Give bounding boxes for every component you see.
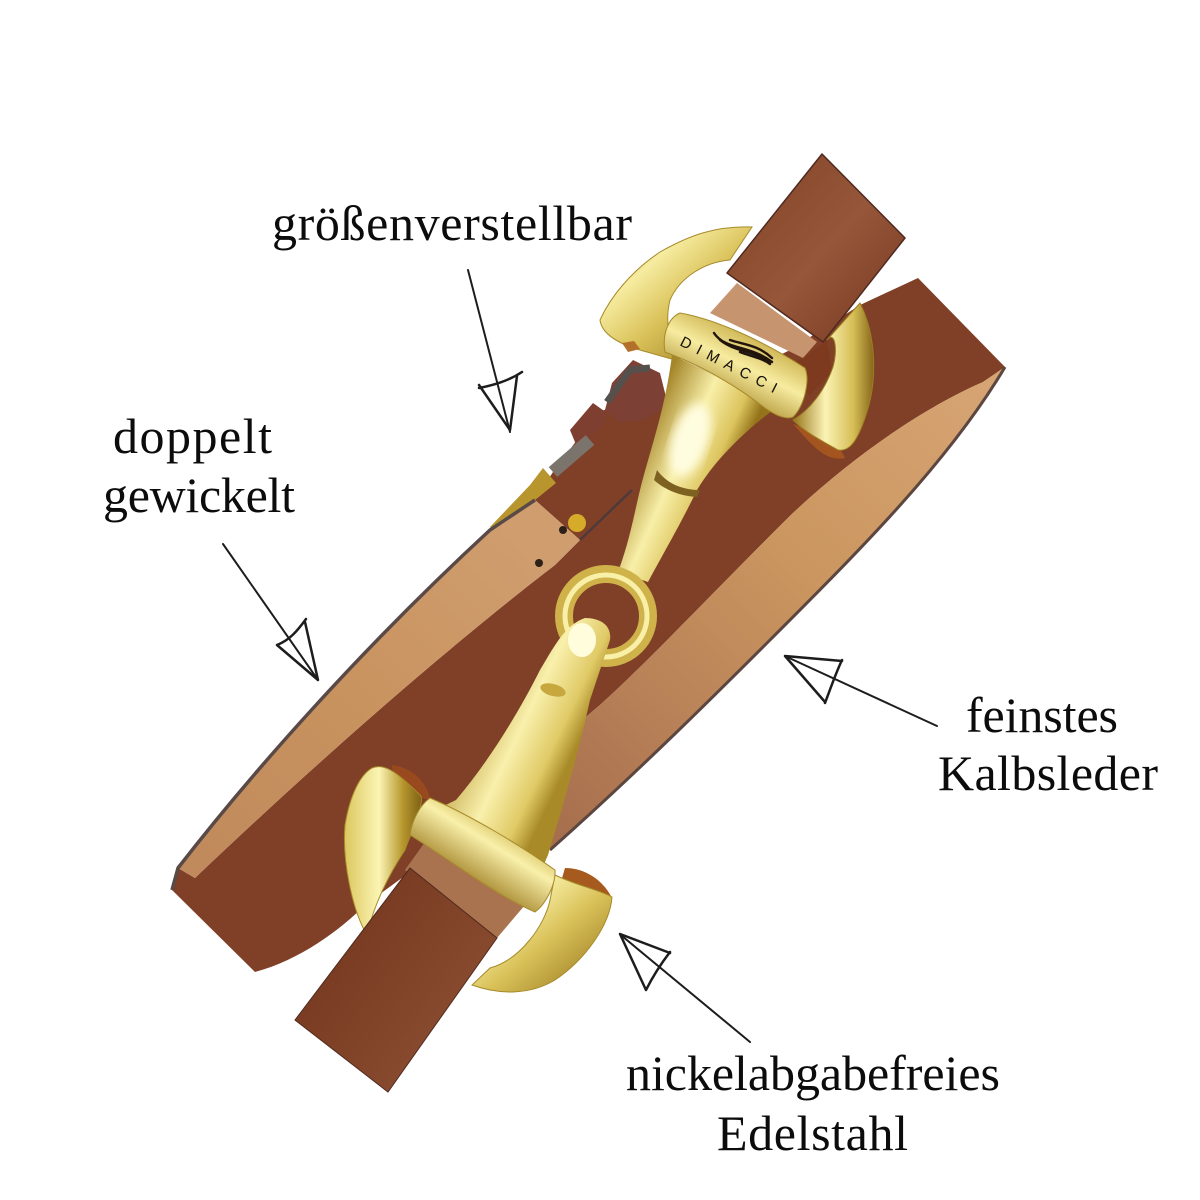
bracelet illustration xyxy=(172,154,1005,1092)
brand logo xyxy=(714,333,772,364)
lower-left wrap: dark edge xyxy=(172,500,535,890)
label: feinstes Kalbsleder: feinstes xyxy=(966,687,1118,743)
lower-left wrap: tan inside xyxy=(178,500,580,878)
top ring xyxy=(600,227,752,362)
small gold buckle xyxy=(490,468,556,533)
shank shadow band xyxy=(654,470,700,497)
label: feinstes Kalbsleder: Kalbsleder xyxy=(938,745,1158,801)
tan underside near lower bar xyxy=(405,835,525,938)
right wrap: dark edge xyxy=(550,367,1005,850)
lower-left horn xyxy=(344,765,430,935)
label: doppelt gewickelt xyxy=(103,408,295,523)
arrow: to adjustable strap xyxy=(468,270,522,432)
right horn of top ring xyxy=(793,303,874,459)
bottom strap end xyxy=(295,868,497,1092)
lower shank xyxy=(425,618,610,885)
shank upper xyxy=(618,355,780,582)
shaded strap under the top bar xyxy=(780,340,832,395)
rear strap keepers and buckle xyxy=(490,360,668,533)
lower shank crease xyxy=(539,681,567,699)
brand name: DIMACCI xyxy=(677,333,786,400)
lower shank knuckle highlight xyxy=(568,623,596,657)
shank highlight xyxy=(661,398,719,482)
label: nickelabgabefreies Edelstahl: Edelstahl xyxy=(717,1105,908,1161)
lower cross bar xyxy=(410,798,555,912)
right wrap: tan inside xyxy=(500,367,1005,850)
label: größenverstellbar: größenverstellbar xyxy=(272,195,632,251)
label: feinstes Kalbsleder xyxy=(938,687,1158,801)
arrow: to leather xyxy=(785,656,937,726)
arrow: to stainless steel xyxy=(620,934,750,1042)
lower-right horn xyxy=(472,868,612,992)
main strap: brown outer surface xyxy=(172,278,1005,972)
tan underside below the top bar xyxy=(710,283,817,358)
center ring xyxy=(564,574,648,658)
top ring tip patch xyxy=(622,341,640,352)
label: nickelabgabefreies Edelstahl: nickelabgabefreies xyxy=(626,1045,1000,1101)
fine divider beside the shank xyxy=(580,490,632,540)
arrow: to double wrap xyxy=(223,544,318,680)
label: nickelabgabefreies Edelstahl xyxy=(626,1045,1000,1161)
belt holes xyxy=(535,526,567,567)
gold rivet xyxy=(568,514,586,532)
center ring highlight xyxy=(565,575,647,657)
top cross bar xyxy=(664,313,807,418)
label: doppelt gewickelt: gewickelt xyxy=(103,467,295,523)
label: doppelt gewickelt: doppelt xyxy=(113,408,272,464)
top strap end xyxy=(727,154,905,342)
